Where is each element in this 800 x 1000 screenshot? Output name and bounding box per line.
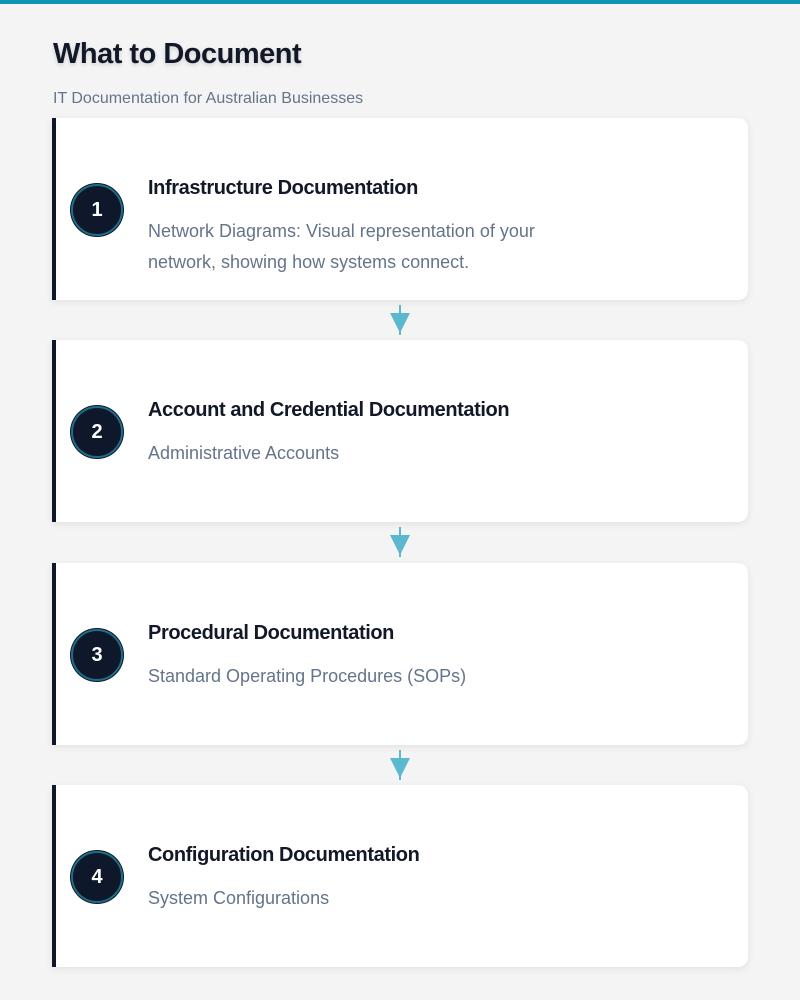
card 4 — [52, 785, 748, 967]
arrow 3 — [390, 750, 410, 780]
card 1 — [52, 118, 748, 300]
heading 3: Procedural Documentation — [148, 622, 394, 644]
card 3 — [52, 563, 748, 745]
text 1: Network Diagrams: Visual representation of your network, showing how systems connect. — [148, 221, 535, 272]
subtitle: IT Documentation for Australian Businesses — [53, 90, 363, 107]
badge 2: 2 — [91, 420, 103, 442]
arrow 2 — [390, 527, 410, 557]
badge 1 — [71, 184, 123, 236]
heading 1: Infrastructure Documentation — [148, 177, 418, 199]
text 3: Standard Operating Procedures (SOPs) — [148, 666, 466, 686]
badge 3 — [71, 629, 123, 681]
badge 2 — [71, 406, 123, 458]
card 2 — [52, 340, 748, 522]
badge 4 — [71, 851, 123, 903]
badge 1: 1 — [91, 198, 103, 220]
badge 4: 4 — [91, 866, 103, 888]
text 2: Administrative Accounts — [148, 443, 339, 463]
badge 3: 3 — [91, 644, 103, 666]
arrow 1 — [390, 305, 410, 335]
heading 4: Configuration Documentation — [148, 844, 419, 866]
title: What to Document — [53, 38, 301, 70]
text 4: System Configurations — [148, 888, 329, 908]
heading 2: Account and Credential Documentation — [148, 399, 509, 421]
